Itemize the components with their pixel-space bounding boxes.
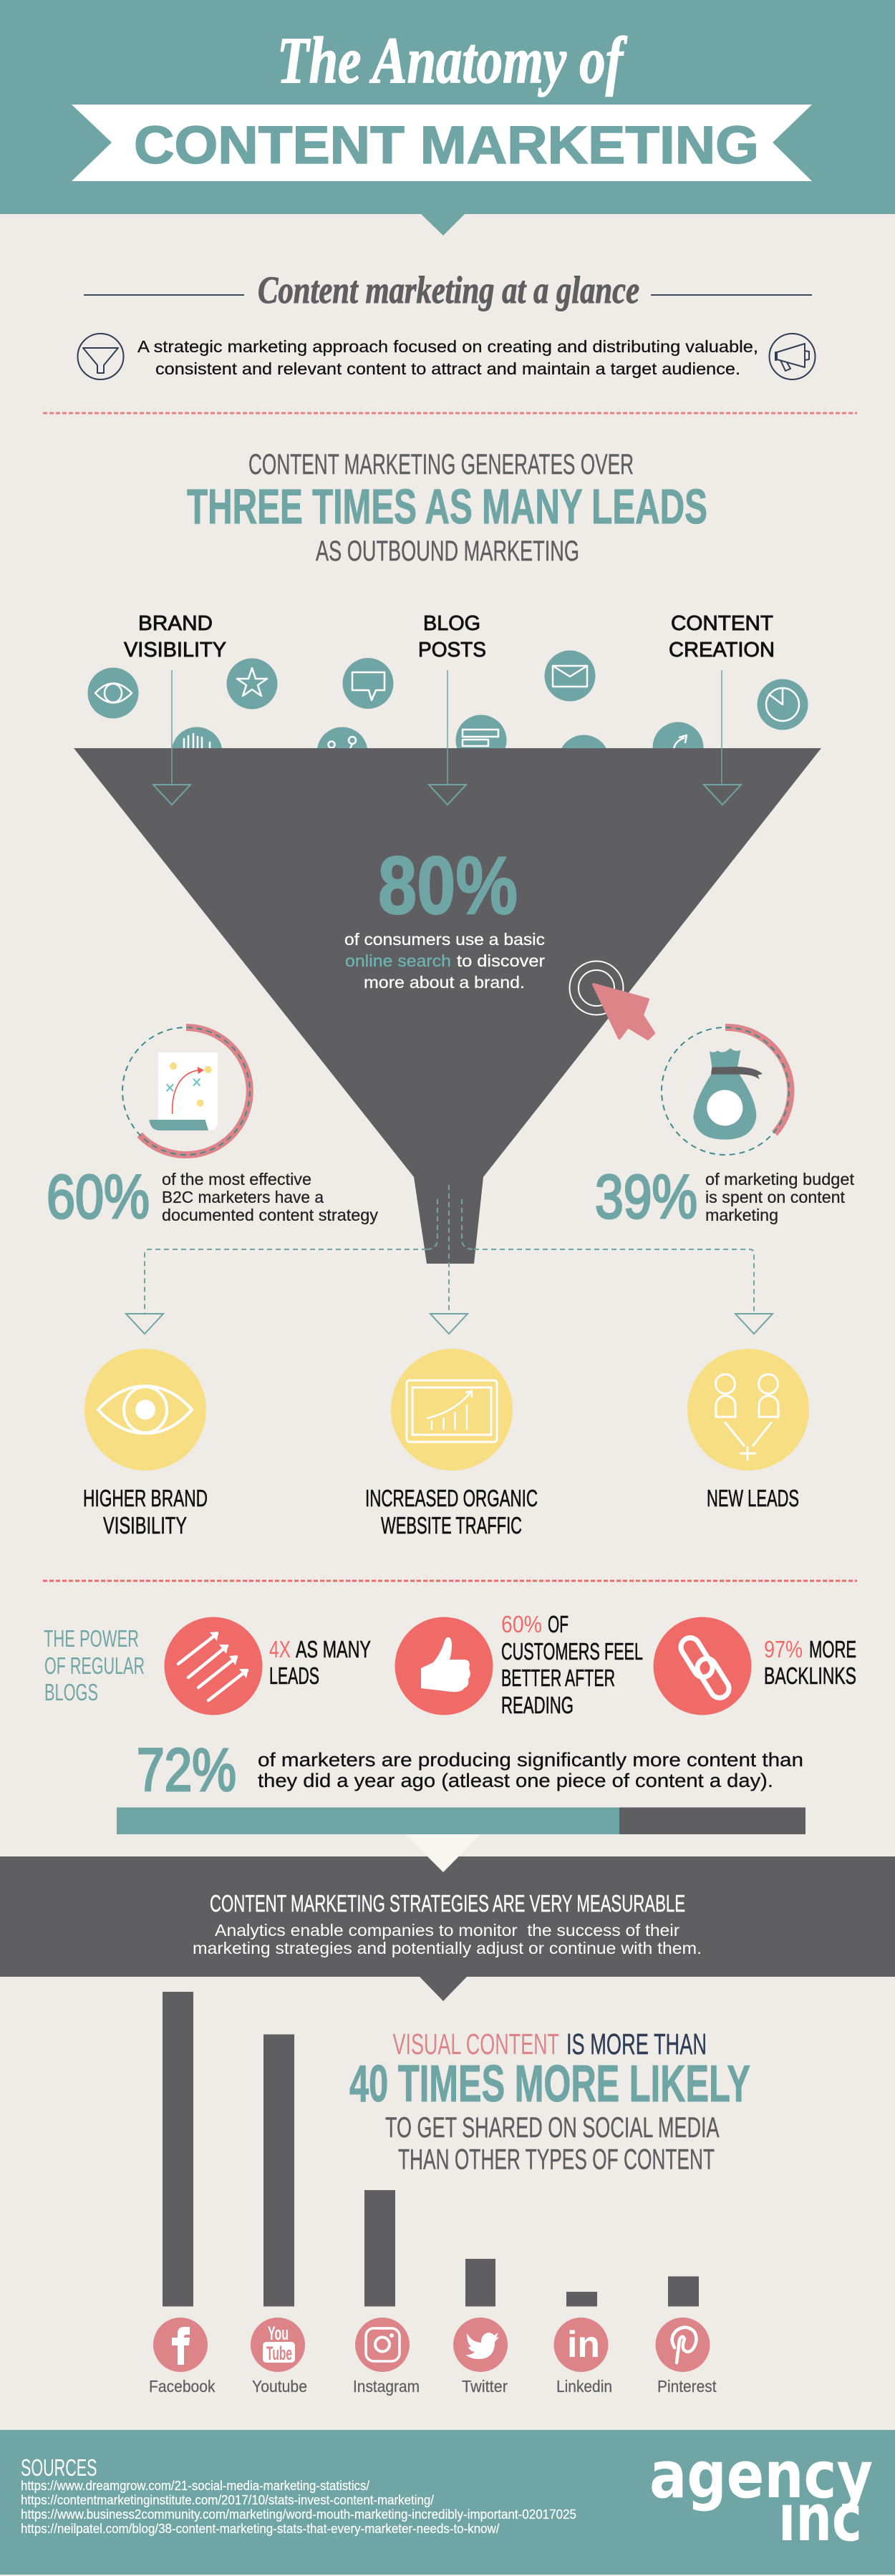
stat: 4x leads: AS MANY — [296, 1636, 371, 1662]
heading: three times as many leads: CONTENT MARKETING GENERATES OVER — [248, 449, 634, 480]
icon: click target and cursor — [570, 961, 654, 1039]
outcome labels: VISIBILITY — [103, 1512, 187, 1539]
sources heading: SOURCES — [21, 2454, 97, 2481]
icon: share arrow bubble — [653, 722, 703, 773]
social labels: Linkedin — [556, 2377, 612, 2396]
definition text — [137, 337, 758, 378]
icon: facebook — [153, 2318, 208, 2372]
icon: thumbs up — [395, 1617, 493, 1715]
heading: 40 times more likely: VISUAL CONTENT — [392, 2028, 559, 2061]
social labels: Instagram — [353, 2377, 420, 2396]
icon: envelope bubble — [544, 650, 596, 702]
stat: 39%: marketing — [705, 1206, 778, 1224]
progress bar — [117, 1807, 806, 1834]
stat: 60% — [47, 1163, 378, 1231]
stat: 72% — [137, 1736, 803, 1803]
stat: 60%: documented content strategy — [162, 1206, 378, 1224]
icon: megaphone — [769, 334, 815, 379]
heading: 40 times more likely: TO GET SHARED ON SOCIAL MEDIA — [385, 2112, 720, 2144]
band text: marketing strategies and potentially adjust or continue with them. — [193, 1939, 702, 1957]
social labels: Facebook — [149, 2377, 216, 2396]
stat: 97% backlinks: 97% — [764, 1636, 803, 1662]
heading: the power of regular blogs: OF REGULAR — [44, 1652, 145, 1679]
icon: partial bubble — [558, 735, 609, 786]
band text: Analytics enable companies to monitor the success of their — [215, 1921, 679, 1940]
icon: youtube: Tube — [266, 2343, 292, 2364]
stat: 39% — [595, 1163, 855, 1231]
stat: 80%: 80% — [378, 841, 518, 931]
ribbon — [72, 105, 812, 181]
bar chart — [163, 1992, 699, 2307]
icon: linkedin — [554, 2318, 609, 2372]
stat: 4x leads: 4X — [269, 1636, 291, 1662]
stat: 80%: of consumers use a basic — [344, 930, 545, 949]
funnel — [74, 748, 821, 1264]
outcome labels — [83, 1485, 799, 1539]
stat: 39%: is spent on content — [705, 1188, 846, 1206]
outcome labels: WEBSITE TRAFFIC — [381, 1512, 522, 1539]
stat: 60% customers: 60% — [501, 1611, 542, 1637]
funnel labels: BRAND — [138, 612, 213, 635]
stat: 72%: of marketers are producing significantly more content than — [258, 1749, 803, 1771]
funnel labels: CONTENT — [671, 612, 773, 635]
icon: chain link — [653, 1617, 752, 1715]
footer — [0, 2430, 895, 2575]
funnel labels — [124, 612, 775, 662]
funnel arrows — [153, 670, 741, 805]
source links: https://www.dreamgrow.com/21-social-media-marketing-statistics/ — [21, 2479, 369, 2493]
stat: 4x leads — [269, 1636, 371, 1689]
icon: yellow eye — [84, 1349, 206, 1471]
icon: bar chart bubble — [172, 727, 222, 778]
icon: yellow people — [687, 1349, 809, 1471]
icon: clock bubble — [758, 679, 808, 730]
outcome labels: HIGHER BRAND — [83, 1485, 208, 1511]
icon: card bubble — [455, 715, 507, 766]
icon: star bubble — [226, 659, 278, 709]
stat: 97% backlinks: MORE — [809, 1636, 856, 1662]
icon: youtube: You — [268, 2323, 289, 2344]
title: The Anatomy of: The Anatomy of — [277, 24, 628, 97]
outcome labels: NEW LEADS — [707, 1485, 799, 1511]
stat: 60%: 60% — [47, 1163, 150, 1231]
source links: https://neilpatel.com/blog/38-content-marketing-stats-that-every-marketer-needs-to-know/ — [21, 2522, 500, 2536]
source links — [21, 2479, 576, 2536]
stat: 4x leads: LEADS — [269, 1662, 319, 1689]
stat: 80%: to discover — [457, 952, 545, 970]
logo: agency inc: inc — [778, 2481, 862, 2556]
divider — [43, 1579, 857, 1582]
heading: the power of regular blogs: BLOGS — [44, 1679, 98, 1705]
icon: yellow website chart — [391, 1349, 513, 1471]
heading: 40 times more likely: THAN OTHER TYPES OF CONTENT — [398, 2144, 715, 2175]
heading: the power of regular blogs — [44, 1625, 145, 1705]
stat: 39%: of marketing budget — [705, 1170, 855, 1188]
section heading: content marketing at a glance: Content marketing at a glance — [258, 268, 639, 311]
stat ring: 39% budget — [662, 1027, 790, 1155]
heading: three times as many leads — [187, 449, 707, 567]
social labels — [149, 2377, 717, 2396]
icon: speech bubble — [342, 658, 394, 709]
stat: 80%: online search — [345, 952, 451, 970]
measurable band — [0, 1834, 895, 2001]
stat: 80%: more about a brand. — [364, 973, 525, 992]
stat: 60%: B2C marketers have a — [162, 1188, 324, 1206]
stat: 60% customers: BETTER AFTER — [501, 1665, 615, 1691]
stat: 60% customers: READING — [501, 1692, 574, 1718]
icon: strategy document — [149, 1052, 218, 1130]
icon: eye bubble — [87, 667, 139, 719]
icon: youtube — [251, 2318, 305, 2372]
source links: https://contentmarketinginstitute.com/2017/10/stats-invest-content-marketing/ — [21, 2493, 434, 2507]
stat: 60% customers: CUSTOMERS FEEL — [501, 1638, 643, 1665]
band text — [193, 1921, 702, 1957]
definition text: A strategic marketing approach focused on creating and distributing valuable, — [137, 337, 758, 356]
icon: linkedin: in — [567, 2324, 600, 2366]
funnel labels: POSTS — [418, 639, 486, 662]
heading: 40 times more likely: IS MORE THAN — [566, 2028, 707, 2061]
definition text: consistent and relevant content to attract and maintain a target audience. — [155, 359, 740, 378]
stat: 97% backlinks — [764, 1636, 856, 1689]
divider — [43, 412, 857, 414]
icon: money bag — [693, 1048, 763, 1140]
funnel labels: BLOG — [423, 612, 480, 635]
stat: 72%: they did a year ago (atleast one piece of content a day). — [258, 1770, 773, 1791]
icon: instagram — [355, 2318, 410, 2372]
icon: pinterest — [656, 2318, 710, 2372]
social labels: Pinterest — [657, 2377, 717, 2396]
icon: funnel outline — [77, 334, 123, 379]
heading: the power of regular blogs: THE POWER — [44, 1625, 139, 1652]
stat: 80% — [344, 841, 545, 992]
outcome labels: INCREASED ORGANIC — [365, 1485, 538, 1511]
icon: twitter — [453, 2318, 508, 2372]
stat: 39%: 39% — [595, 1163, 697, 1231]
heading: three times as many leads: AS OUTBOUND MARKETING — [316, 536, 579, 567]
stat: 60% customers — [501, 1611, 643, 1718]
heading: 40 times more likely — [349, 2028, 750, 2175]
social labels: Youtube — [252, 2377, 307, 2396]
logo: agency inc — [652, 2461, 872, 2542]
header banner — [0, 0, 895, 236]
icon: people bubble — [316, 727, 368, 778]
social labels: Twitter — [462, 2377, 508, 2396]
stat ring: 60% strategy — [122, 1027, 250, 1155]
funnel labels: CREATION — [669, 639, 775, 662]
stat: 60%: of the most effective — [162, 1170, 311, 1188]
funnel output dashed arrows — [126, 1185, 773, 1334]
funnel labels: VISIBILITY — [124, 639, 226, 662]
title: Content Marketing: CONTENT MARKETING — [134, 115, 759, 175]
stat: 97% backlinks: BACKLINKS — [764, 1662, 856, 1689]
source links: https://www.business2community.com/marketing/word-mouth-marketing-incredibly-important-02017025 — [21, 2507, 576, 2522]
stat: 72%: 72% — [137, 1736, 236, 1803]
stat: 60% customers: OF — [548, 1611, 569, 1637]
icon: growth arrows — [165, 1617, 262, 1715]
